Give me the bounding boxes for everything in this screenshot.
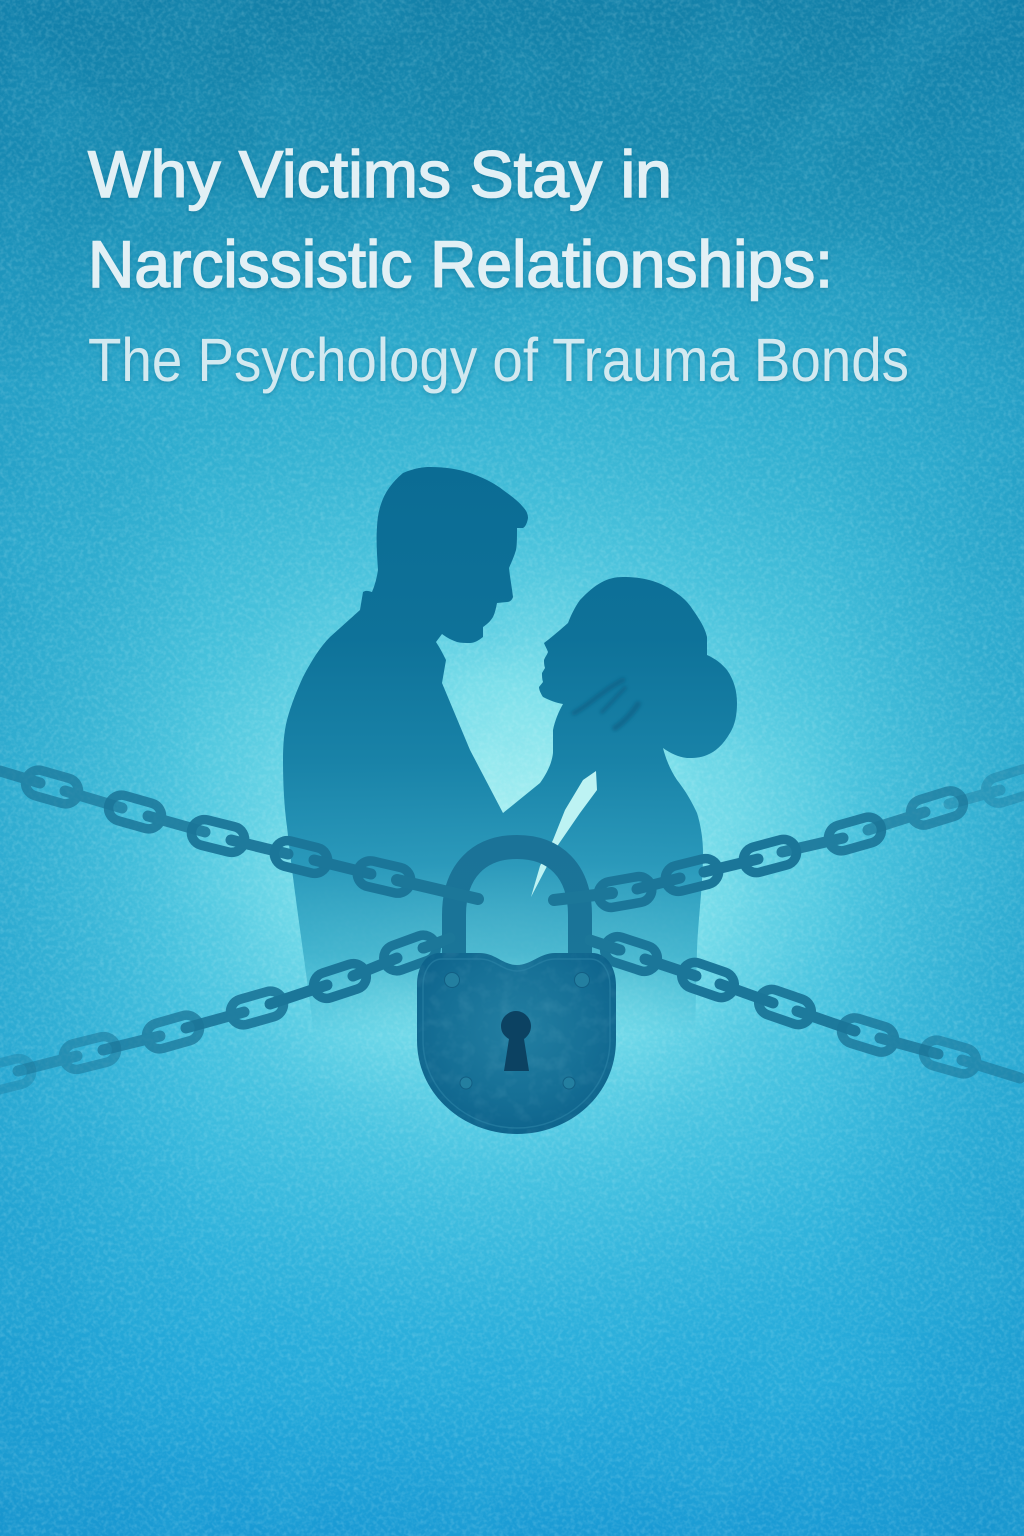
chain: upper left [0,767,413,896]
padlock [397,847,620,1135]
heading line 1: Why Victims Stay in [88,137,672,211]
shackle [454,847,580,960]
chain: lower right [588,933,1020,1078]
lock body [417,953,616,1134]
chain: lower left [0,932,455,1094]
man and woman silhouettes [283,467,737,1035]
chain ends over shackle [397,880,620,950]
body texture [417,953,617,1135]
chains behind lock [0,766,1024,1094]
hand with finger marks [574,680,638,728]
subtitle: The Psychology of Trauma Bonds [88,326,909,394]
chain: upper right [596,766,1024,909]
inner rim [423,959,610,1128]
gap between the figures [531,771,597,897]
rivets [444,972,590,1089]
couple silhouette [283,467,737,1035]
heading line 2: Narcissistic Relationships: [88,227,833,301]
keyhole [501,1011,531,1071]
